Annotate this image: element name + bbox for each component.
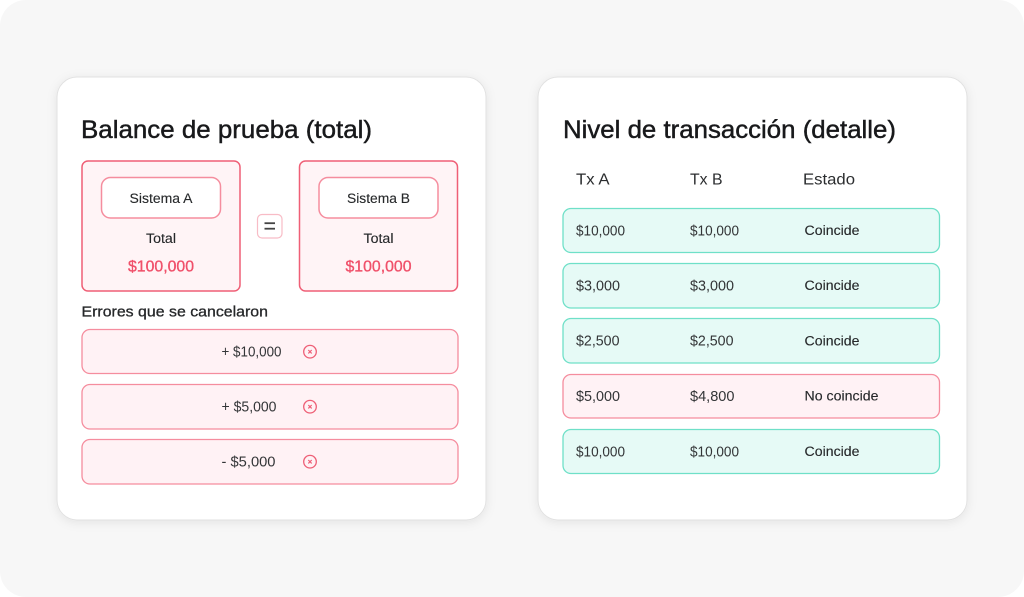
row 2: $3,000 <box>576 278 620 294</box>
box: sistema B: Total <box>364 231 394 246</box>
box: sistema A: Sistema A <box>130 191 192 206</box>
box: sistema A: $100,000 <box>128 258 194 276</box>
box: sistema A: Total <box>146 231 176 246</box>
error row: -5,000 <box>82 440 458 484</box>
row 1: Coincide <box>804 223 860 238</box>
row 3 <box>563 318 940 363</box>
panel: balance de prueba <box>57 77 486 520</box>
row 1: $10,000 <box>690 224 739 240</box>
row 3: $2,500 <box>690 334 734 350</box>
row 3: $2,500 <box>576 334 620 350</box>
subheading: errores: Errores que se cancelaron <box>82 304 268 320</box>
icon: equals <box>258 214 282 238</box>
row 4: mismatch: $5,000 <box>576 389 620 405</box>
panel: nivel de transacción <box>538 77 967 520</box>
table header <box>576 172 855 188</box>
row 3: Coincide <box>804 334 860 348</box>
error row: +10,000 <box>82 330 458 374</box>
heading: nivel de transacción: Nivel de transacción (detalle) <box>563 116 896 144</box>
box: sistema B <box>300 161 458 291</box>
row 4: mismatch <box>563 374 940 418</box>
box: sistema A <box>82 161 240 291</box>
row 5: $10,000 <box>690 444 739 460</box>
row 5: Coincide <box>804 444 860 459</box>
row 1: $10,000 <box>576 224 625 240</box>
table header: Estado <box>803 172 855 188</box>
row 4: mismatch: $4,800 <box>690 389 734 405</box>
box: sistema B: Sistema B <box>347 191 410 206</box>
box: sistema B: $100,000 <box>346 258 412 276</box>
error row: +5,000: + $5,000 <box>222 400 276 416</box>
table header: Tx A <box>576 172 610 188</box>
error row: -5,000: - $5,000 <box>222 454 276 470</box>
row 4: mismatch: No coincide <box>804 388 878 404</box>
row 1 <box>563 208 940 252</box>
error row: +10,000: + $10,000 <box>222 344 282 360</box>
row 2: $3,000 <box>690 278 734 294</box>
heading: balance de prueba: Balance de prueba (total) <box>81 116 372 144</box>
row 5 <box>563 430 940 474</box>
row 2 <box>563 264 940 308</box>
row 2: Coincide <box>804 278 860 293</box>
error row: +5,000 <box>82 384 458 429</box>
row 5: $10,000 <box>576 444 625 460</box>
table header: Tx B <box>690 172 722 188</box>
